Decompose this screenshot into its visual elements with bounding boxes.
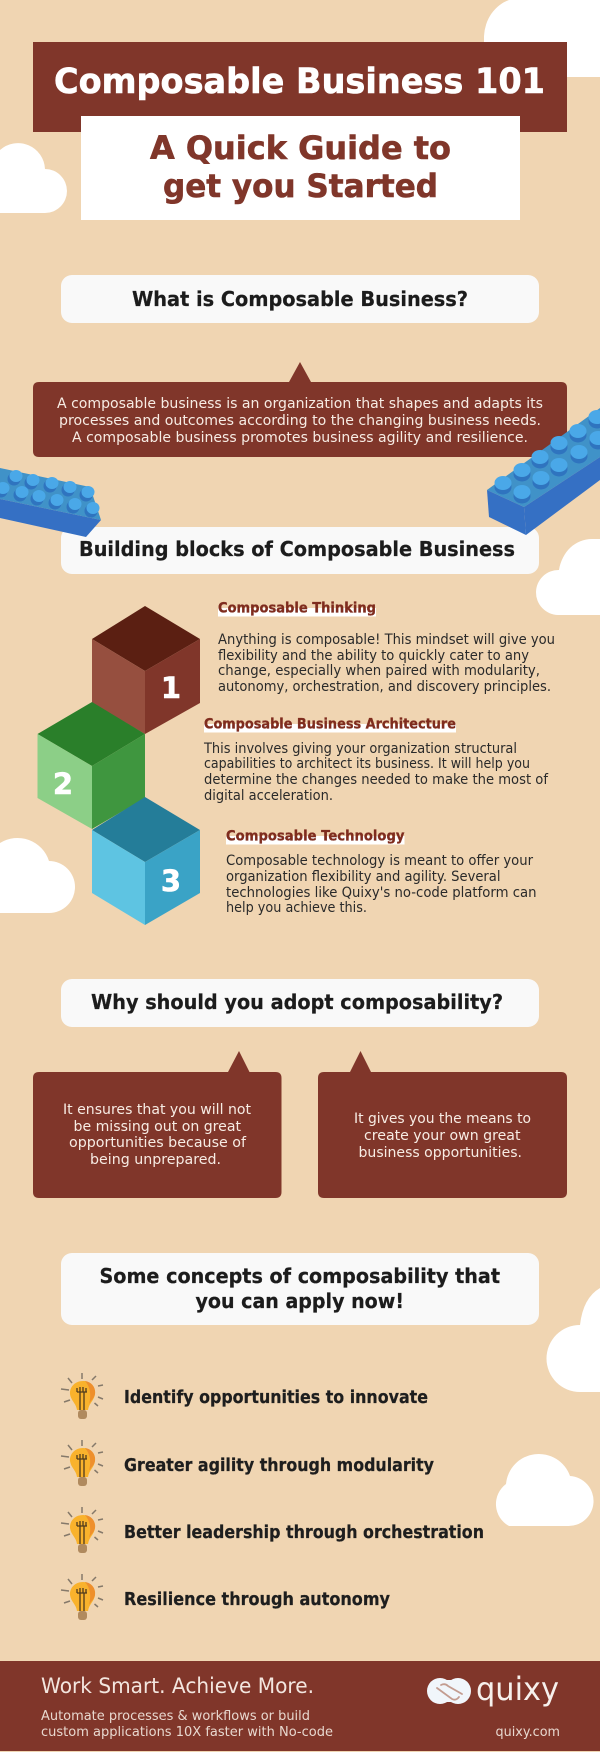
main title: Composable Business 101 [54,62,545,102]
footer description [41,1708,333,1740]
concept: resilience [61,1574,390,1620]
cube 2: 2 [53,767,73,801]
footer tagline: Work Smart. Achieve More. [41,1674,314,1698]
subtitle panel: A Quick Guide to [150,129,451,167]
cube 3 [92,797,200,925]
cube 2 [38,702,145,829]
block: composable technology: Composable technology is meant to offer your [226,853,533,869]
heading: concepts of composability: you can apply now! [196,1289,404,1313]
cube stack [38,606,200,925]
callout: definition [33,362,567,457]
heading: building blocks [61,527,539,574]
callout: reason two: create your own great [364,1128,521,1144]
block: composable thinking [218,600,555,695]
concept: greater agility [61,1440,434,1486]
website: quixy.com [496,1724,560,1740]
block: composable business architecture: digital acceleration. [204,788,333,804]
block: composable thinking: Composable Thinking [218,600,376,616]
cloud: middle right [536,539,600,615]
callout: reason two [318,1051,567,1198]
block: composable technology: technologies like Quixy's no-code platform can [226,885,536,901]
block: composable thinking: Anything is composable! This mindset will give you [218,632,555,648]
block: composable business architecture: determine the changes needed to make the most of [204,772,549,788]
callout: definition: processes and outcomes according to the changing business needs. [59,413,541,429]
block: composable technology: Composable Technology [226,828,404,844]
heading: concepts of composability: Some concepts of composability that [100,1264,500,1288]
subtitle panel [81,116,520,220]
block: composable business architecture: capabilities to architect its business. It will help you [204,756,530,772]
footer [0,1661,600,1751]
callout: reason two: It gives you the means to [354,1111,531,1127]
icon: right blue brick [487,408,600,535]
cube 3: 3 [161,864,181,898]
footer description: custom applications 10X faster with No-code [41,1724,333,1740]
heading: what is composable business: What is Composable Business? [132,287,468,311]
block: composable business architecture: This involves giving your organization structural [203,741,517,757]
icon: left blue brick [0,468,101,537]
concept: identify opportunities [61,1373,428,1419]
heading: what is composable business [61,275,539,323]
callout: reason one: opportunities because of [69,1135,247,1151]
callout: reason one: being unprepared. [90,1152,221,1168]
block: composable technology: help you achieve this. [226,900,367,916]
callout: definition: A composable business is an organization that shapes and adapts its [57,396,543,412]
concept: identify opportunities: Identify opportunities to innovate [124,1387,428,1408]
concept: better leadership: Better leadership through orchestration [124,1522,484,1543]
block: composable thinking: autonomy, orchestration, and discovery principles. [218,679,551,695]
subtitle panel: get you Started [163,167,438,205]
cloud: lower right [496,1454,594,1526]
callout: definition: A composable business promotes business agility and resilience. [72,430,528,446]
block: composable business architecture: Composable Business Architecture [204,716,456,732]
concept: resilience: Resilience through autonomy [124,1589,390,1610]
cloud: right of concepts heading [546,1288,600,1392]
block: composable technology [226,828,536,916]
cloud: lower left [0,838,75,913]
callout: reason one: It ensures that you will not [63,1102,251,1118]
block: composable thinking: flexibility and the ability to quickly cater to any [218,648,529,664]
icon: light bulb [61,1373,103,1419]
callout: reason one: be missing out on great [74,1119,241,1135]
heading: building blocks: Building blocks of Composable Business [79,537,515,561]
heading: why adopt composability: Why should you adopt composability? [91,990,503,1014]
icon: quixy logo mark [427,1678,471,1704]
block: composable technology: organization flexibility and agility. Several [226,869,500,885]
concept: better leadership [61,1507,484,1553]
concept: greater agility: Greater agility through modularity [124,1455,434,1476]
icon: light bulb [61,1507,103,1553]
callout: reason one [33,1051,282,1198]
icon: light bulb [61,1574,103,1620]
cloud: upper left [0,143,67,213]
heading: why adopt composability [61,979,539,1027]
cube 1 [92,606,200,734]
block: composable business architecture [203,716,549,804]
block: composable thinking: change, especially when paired with modularity, [218,663,540,679]
footer description: Automate processes & workflows or build [41,1708,310,1724]
cloud: top right [484,0,600,77]
title banner [33,42,567,132]
quixy wordmark: quixy [476,1670,559,1708]
callout: reason two: business opportunities. [358,1145,522,1161]
cube 1: 1 [161,671,181,705]
icon: light bulb [61,1440,103,1486]
heading: concepts of composability [61,1253,539,1325]
